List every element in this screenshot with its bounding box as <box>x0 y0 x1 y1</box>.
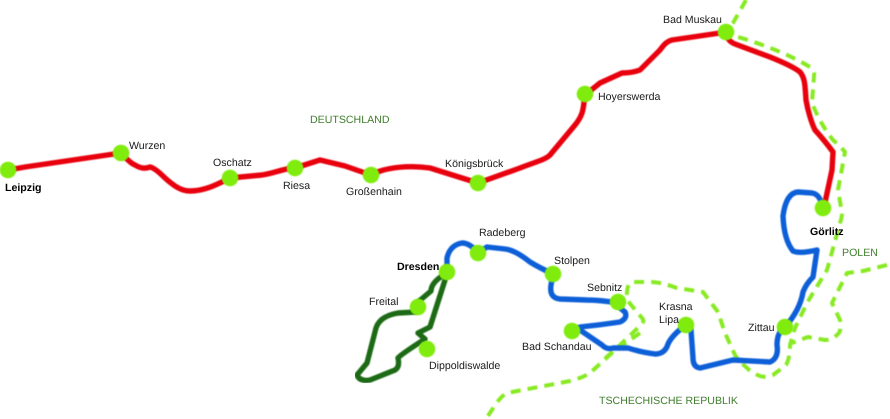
labels: countries <box>310 114 878 407</box>
labels: towns: Radeberg <box>479 227 526 239</box>
labels: towns: Stolpen <box>554 255 590 267</box>
labels: towns: Leipzig <box>5 182 42 194</box>
labels: towns: Zittau <box>748 322 775 334</box>
labels: towns: Bad Schandau <box>522 341 592 353</box>
labels: towns: Lipa <box>659 314 679 326</box>
labels: countries: POLEN <box>842 247 878 259</box>
labels: towns: Hoyerswerda <box>598 91 661 103</box>
labels: towns: Riesa <box>283 180 310 192</box>
border: dashed national borders <box>487 0 887 417</box>
labels: countries: DEUTSCHLAND <box>310 114 390 126</box>
labels: towns: Görlitz <box>810 226 844 238</box>
labels: towns: Sebnitz <box>587 282 622 294</box>
labels: towns: Großenhain <box>346 186 402 198</box>
stations: green dots <box>0 24 831 357</box>
labels: towns: Wurzen <box>129 140 165 152</box>
route: blue line <box>447 192 823 368</box>
labels: towns: Oschatz <box>213 157 252 169</box>
labels: towns: Freital <box>369 296 398 308</box>
labels: towns: Königsbrück <box>445 158 504 170</box>
route: dark green loop <box>357 272 447 380</box>
labels: countries: TSCHECHISCHE REPUBLIK <box>599 395 738 407</box>
labels: towns: Dippoldiswalde <box>429 360 500 372</box>
labels: towns: Dresden <box>397 261 439 273</box>
labels: towns: Bad Muskau <box>663 14 722 26</box>
labels: towns: Krasna <box>659 301 693 313</box>
route: red line <box>8 32 833 207</box>
